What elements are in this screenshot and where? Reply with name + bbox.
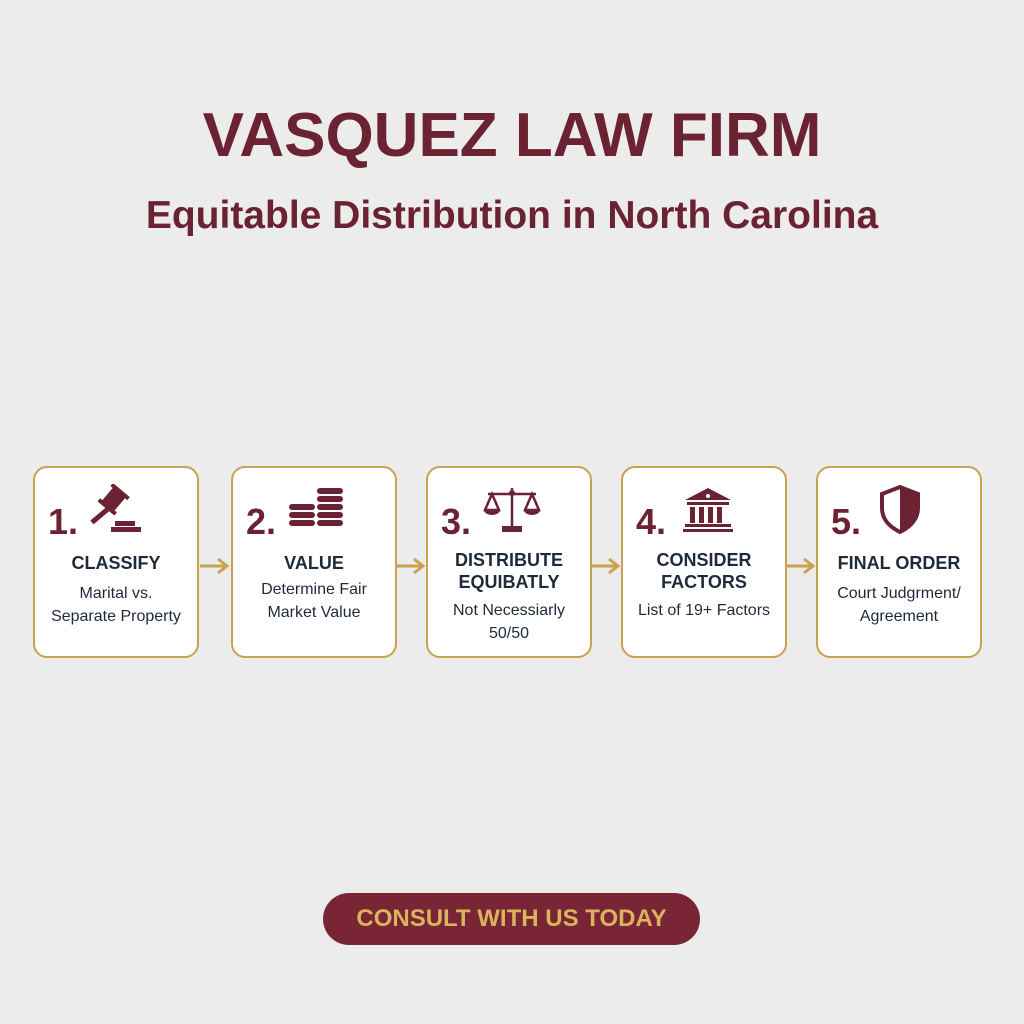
description	[261, 581, 367, 621]
icon: shield	[880, 484, 920, 534]
number 4: 4.	[636, 501, 666, 542]
description: Not Necessiarly	[453, 602, 565, 619]
heading: EQUIBATLY	[458, 572, 560, 592]
arrow	[787, 558, 816, 574]
arrow	[397, 558, 426, 574]
number 1: 1.	[48, 501, 78, 542]
arrow	[200, 558, 230, 574]
description	[837, 585, 961, 625]
button: consult: CONSULT WITH US TODAY	[356, 905, 667, 932]
panel: step 1 classify	[33, 466, 199, 658]
heading	[656, 550, 752, 592]
panel: step 3 distribute	[426, 466, 592, 658]
panel: step 4 factors	[621, 466, 787, 658]
title: VASQUEZ LAW FIRM	[203, 101, 821, 170]
description	[453, 602, 565, 642]
subtitle: Equitable Distribution in North Carolina	[146, 194, 878, 237]
heading: CLASSIFY	[71, 553, 160, 573]
icon: scales	[483, 488, 541, 532]
description: Market Value	[267, 604, 361, 621]
heading: FINAL ORDER	[838, 553, 960, 573]
number 5: 5.	[831, 501, 861, 542]
heading: CONSIDER	[656, 550, 752, 570]
number 3: 3.	[441, 501, 471, 542]
description	[51, 585, 181, 625]
icon: courthouse	[683, 488, 733, 532]
heading: DISTRIBUTE	[455, 550, 563, 570]
arrow	[592, 558, 620, 574]
description: Marital vs.	[80, 585, 152, 602]
panel: step 5 final order	[816, 466, 982, 658]
icon: gavel	[90, 484, 141, 532]
heading	[455, 550, 563, 592]
description: 50/50	[489, 625, 529, 642]
heading: VALUE	[284, 553, 344, 573]
description: List of 19+ Factors	[638, 602, 770, 619]
description: Separate Property	[51, 608, 181, 625]
heading: FACTORS	[661, 572, 747, 592]
number 2: 2.	[246, 501, 276, 542]
button: consult	[323, 893, 700, 945]
icon: coins	[289, 488, 343, 526]
description: Determine Fair	[261, 581, 367, 598]
description: Agreement	[860, 608, 938, 625]
panel: step 2 value	[231, 466, 397, 658]
description: Court Judgrment/	[837, 585, 961, 602]
